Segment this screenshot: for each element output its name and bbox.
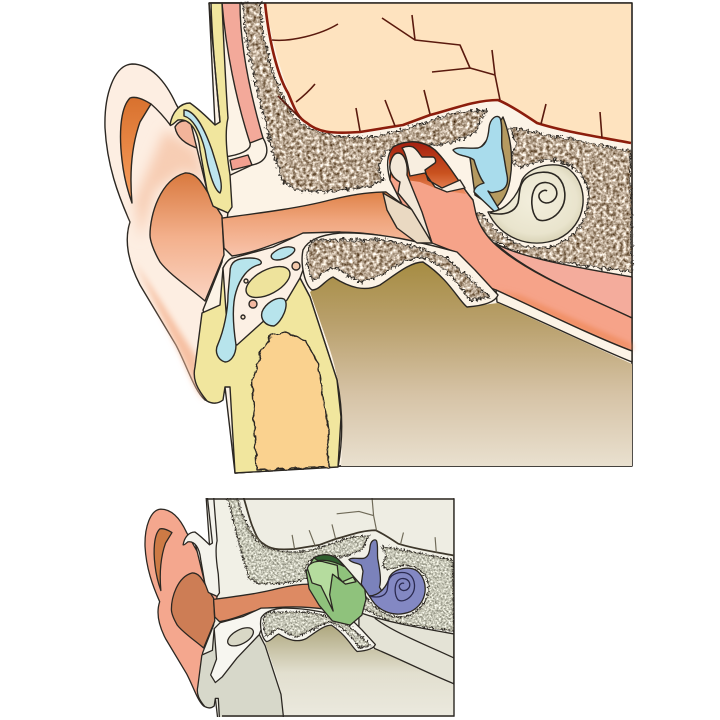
lower bone textured xyxy=(307,240,490,300)
small sulci xyxy=(246,495,436,552)
temple muscle xyxy=(222,3,263,143)
small helix crescent xyxy=(154,529,172,591)
middle ear and eustachian tube xyxy=(390,142,632,351)
small tube line xyxy=(375,618,454,658)
antihelix shading xyxy=(135,130,205,240)
temple divider lines xyxy=(224,138,267,178)
fat pad xyxy=(252,332,328,470)
inner ear blue vestibule xyxy=(453,116,508,212)
brain sulci xyxy=(272,15,602,138)
lower cavity xyxy=(310,262,632,466)
small inner ear purple vestibule xyxy=(349,540,382,598)
lower cavity edge xyxy=(300,278,342,467)
gland small circles xyxy=(241,262,300,319)
small pinna xyxy=(145,509,224,707)
gland blue right xyxy=(262,298,286,326)
small gland ellipse xyxy=(227,627,254,646)
tube orange shade xyxy=(496,290,632,350)
concha xyxy=(150,173,224,301)
tan vestibule backing xyxy=(470,117,512,208)
small gland white xyxy=(211,608,283,683)
head section background xyxy=(190,3,632,473)
small lower bone border xyxy=(261,608,375,652)
brain meninges red border xyxy=(265,3,631,143)
small upper cartilage xyxy=(183,495,219,596)
parotid yellow xyxy=(194,268,341,473)
small bone right xyxy=(362,547,454,631)
small concha xyxy=(171,573,215,648)
small colour-coded ear diagram xyxy=(145,495,454,720)
attic outline xyxy=(388,142,473,200)
frame outline xyxy=(209,3,632,473)
small ear canal xyxy=(214,584,327,622)
pinna outer ear xyxy=(105,64,240,402)
gland cream area xyxy=(223,232,340,345)
gland yellow ellipse xyxy=(241,260,295,304)
tube muscle pink xyxy=(495,243,632,318)
small brain border xyxy=(243,495,453,555)
brain xyxy=(265,3,631,143)
cochlea spiral xyxy=(490,172,565,221)
small parotid gray xyxy=(197,629,283,720)
small cochlea xyxy=(369,568,425,614)
ear canal xyxy=(222,192,420,256)
upper cartilage yellow xyxy=(170,3,232,213)
bone right textured xyxy=(475,128,632,272)
lobe shading xyxy=(135,262,205,400)
helix crescent xyxy=(121,97,151,203)
main ear diagram xyxy=(105,3,632,473)
gland blue large xyxy=(216,258,261,362)
incus and stapes ossicle xyxy=(402,146,465,192)
small head background xyxy=(195,495,454,720)
temple pink box xyxy=(230,155,252,170)
small middle ear green xyxy=(306,555,366,625)
small upper bone xyxy=(226,495,369,584)
helix ridge line xyxy=(151,104,171,126)
small brain xyxy=(270,498,454,556)
lower tube cream band xyxy=(496,290,632,362)
frame left edge xyxy=(209,3,220,122)
fossa xyxy=(175,121,200,149)
middle ear attic red xyxy=(389,142,466,194)
small middle ear attic dark green xyxy=(314,555,344,567)
gland blue small xyxy=(271,247,295,260)
ear anatomy illustration xyxy=(104,0,636,717)
eardrum xyxy=(383,193,432,243)
upper bone textured xyxy=(243,3,488,191)
small cochlea spiral xyxy=(371,573,415,601)
malleus ossicle xyxy=(390,153,432,243)
small tube band xyxy=(359,612,454,684)
small lower cavity xyxy=(265,625,454,720)
small ossicle light green xyxy=(307,561,356,611)
small lower bone xyxy=(264,612,371,647)
lower bone cream border xyxy=(302,233,498,307)
cochlea xyxy=(488,165,583,243)
small frame xyxy=(206,499,454,716)
cartilage blue inlet xyxy=(184,110,221,193)
